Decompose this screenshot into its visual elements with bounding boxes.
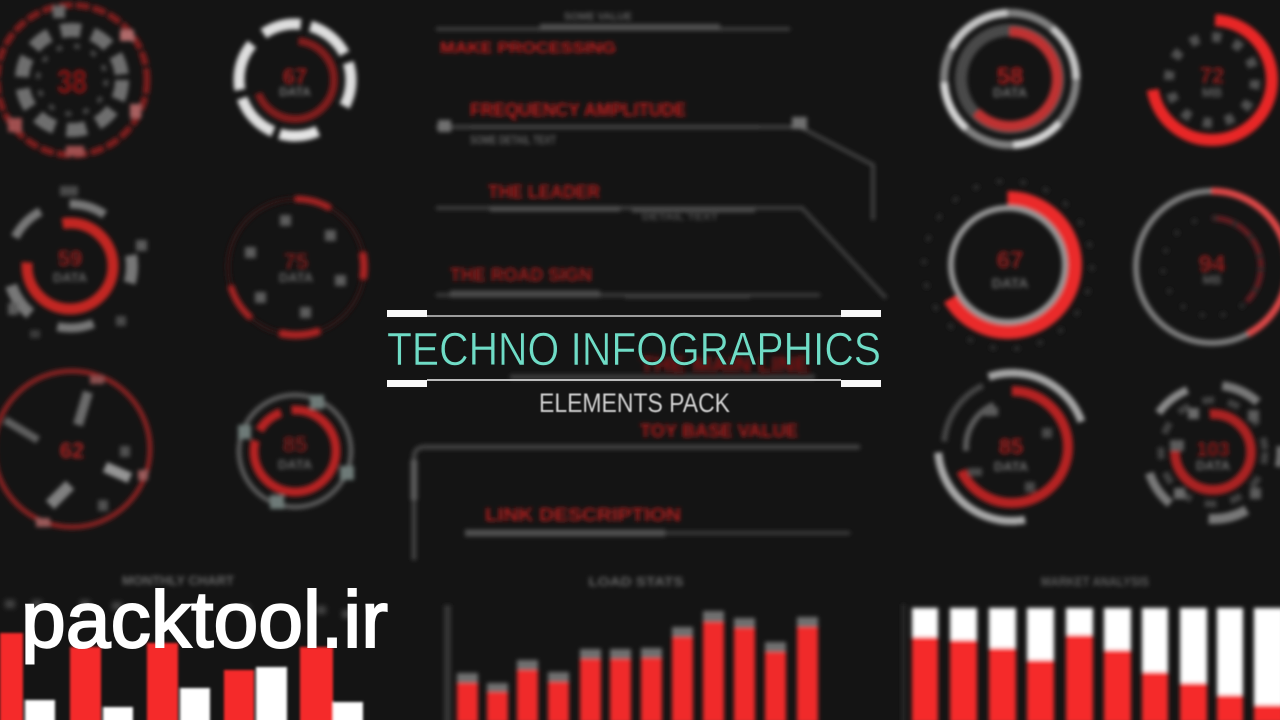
callout label: link description: LINK DESCRIPTION xyxy=(485,505,681,525)
gauge: double ring 94 xyxy=(1136,191,1280,343)
gauge: red ring with grey arcs: DATA xyxy=(53,270,88,285)
bar chart title: right: MARKET ANALYSIS xyxy=(1041,574,1149,589)
gauge: red ring with grey fragments: 103 xyxy=(1196,439,1230,461)
gauge: red arc with grey outer arcs: DATA xyxy=(994,459,1029,474)
gauge: white segmented ring xyxy=(239,24,351,136)
gauge: red dashes with grey squares: 75 xyxy=(284,249,308,274)
callout connector lines xyxy=(414,27,886,560)
bar chart: left red and white bars xyxy=(0,633,363,720)
title frame xyxy=(387,310,881,387)
bar chart: right stacked bars xyxy=(902,604,1280,720)
title: TECHNO INFOGRAPHICS xyxy=(387,323,881,375)
bar chart title: left: MONTHLY CHART xyxy=(122,573,234,588)
gauge: top right ring 58: DATA xyxy=(993,85,1028,100)
gauge: double ring 94: MB xyxy=(1203,273,1222,287)
gauge: grey ring with red donut: 85 xyxy=(283,432,307,457)
gauge: grey ring with red donut: DATA xyxy=(278,457,313,472)
gauge: white segmented ring: 67 xyxy=(283,64,307,89)
gauge: bright red arc with dots: 72 xyxy=(1200,63,1224,88)
bar chart: middle red bars with grey caps xyxy=(444,605,818,720)
gauge: bright red arc with dots: MB xyxy=(1202,85,1222,100)
gauge: red dashes with grey squares: DATA xyxy=(279,270,314,285)
callout label: frequency amplitude: FREQUENCY AMPLITUDE xyxy=(470,100,686,120)
subtitle: ELEMENTS PACK xyxy=(539,388,730,418)
gauge: large red arc over grey ring xyxy=(924,181,1092,349)
gauge: radar disc: 62 xyxy=(60,438,84,463)
gauge: red arc with grey outer arcs: 85 xyxy=(999,434,1023,459)
gauge: top left dashed ring: 38 xyxy=(57,63,87,100)
gauge: red ring with grey arcs xyxy=(8,186,147,338)
gauge: white segmented ring: DATA xyxy=(279,85,311,99)
gauge: bright red arc with dots xyxy=(1152,20,1272,140)
callout label: the leader: THE LEADER xyxy=(488,182,600,202)
bar chart title: middle: LOAD STATS xyxy=(588,574,684,589)
gauge: large red arc over grey ring: 67 xyxy=(997,247,1023,274)
callout label: top grey: SOME VALUE xyxy=(564,11,632,23)
gauge: red dashes with grey squares xyxy=(228,199,364,335)
gauge: double ring 94: 94 xyxy=(1199,251,1226,278)
gauge: red ring with grey arcs: 59 xyxy=(58,246,82,271)
callout sublabel: DETAIL TEXT xyxy=(642,211,718,223)
gauge: top right ring 58 xyxy=(944,13,1076,145)
gauge: large red arc over grey ring: DATA xyxy=(992,275,1028,291)
gauge: red arc with grey outer arcs xyxy=(938,373,1086,521)
watermark: packtool.ir xyxy=(21,575,388,664)
gauge: top left dashed ring xyxy=(0,5,147,156)
callout label behind title: THE MAIN LINE xyxy=(640,352,810,377)
callout label: make processing: MAKE PROCESSING xyxy=(440,40,616,57)
callout sublabel: SOME DETAIL TEXT xyxy=(470,133,556,147)
callout label: toy base value: TOY BASE VALUE xyxy=(640,421,798,441)
gauge: grey ring with red donut xyxy=(238,395,354,509)
gauge: top right ring 58: 58 xyxy=(997,63,1023,90)
gauge: red ring with grey fragments xyxy=(1146,353,1280,519)
callout label: the road sign: THE ROAD SIGN xyxy=(450,265,592,285)
gauge: red ring with grey fragments: DATA xyxy=(1196,458,1231,473)
left chart legend ticks xyxy=(5,600,352,618)
gauge: radar disc xyxy=(0,371,150,527)
